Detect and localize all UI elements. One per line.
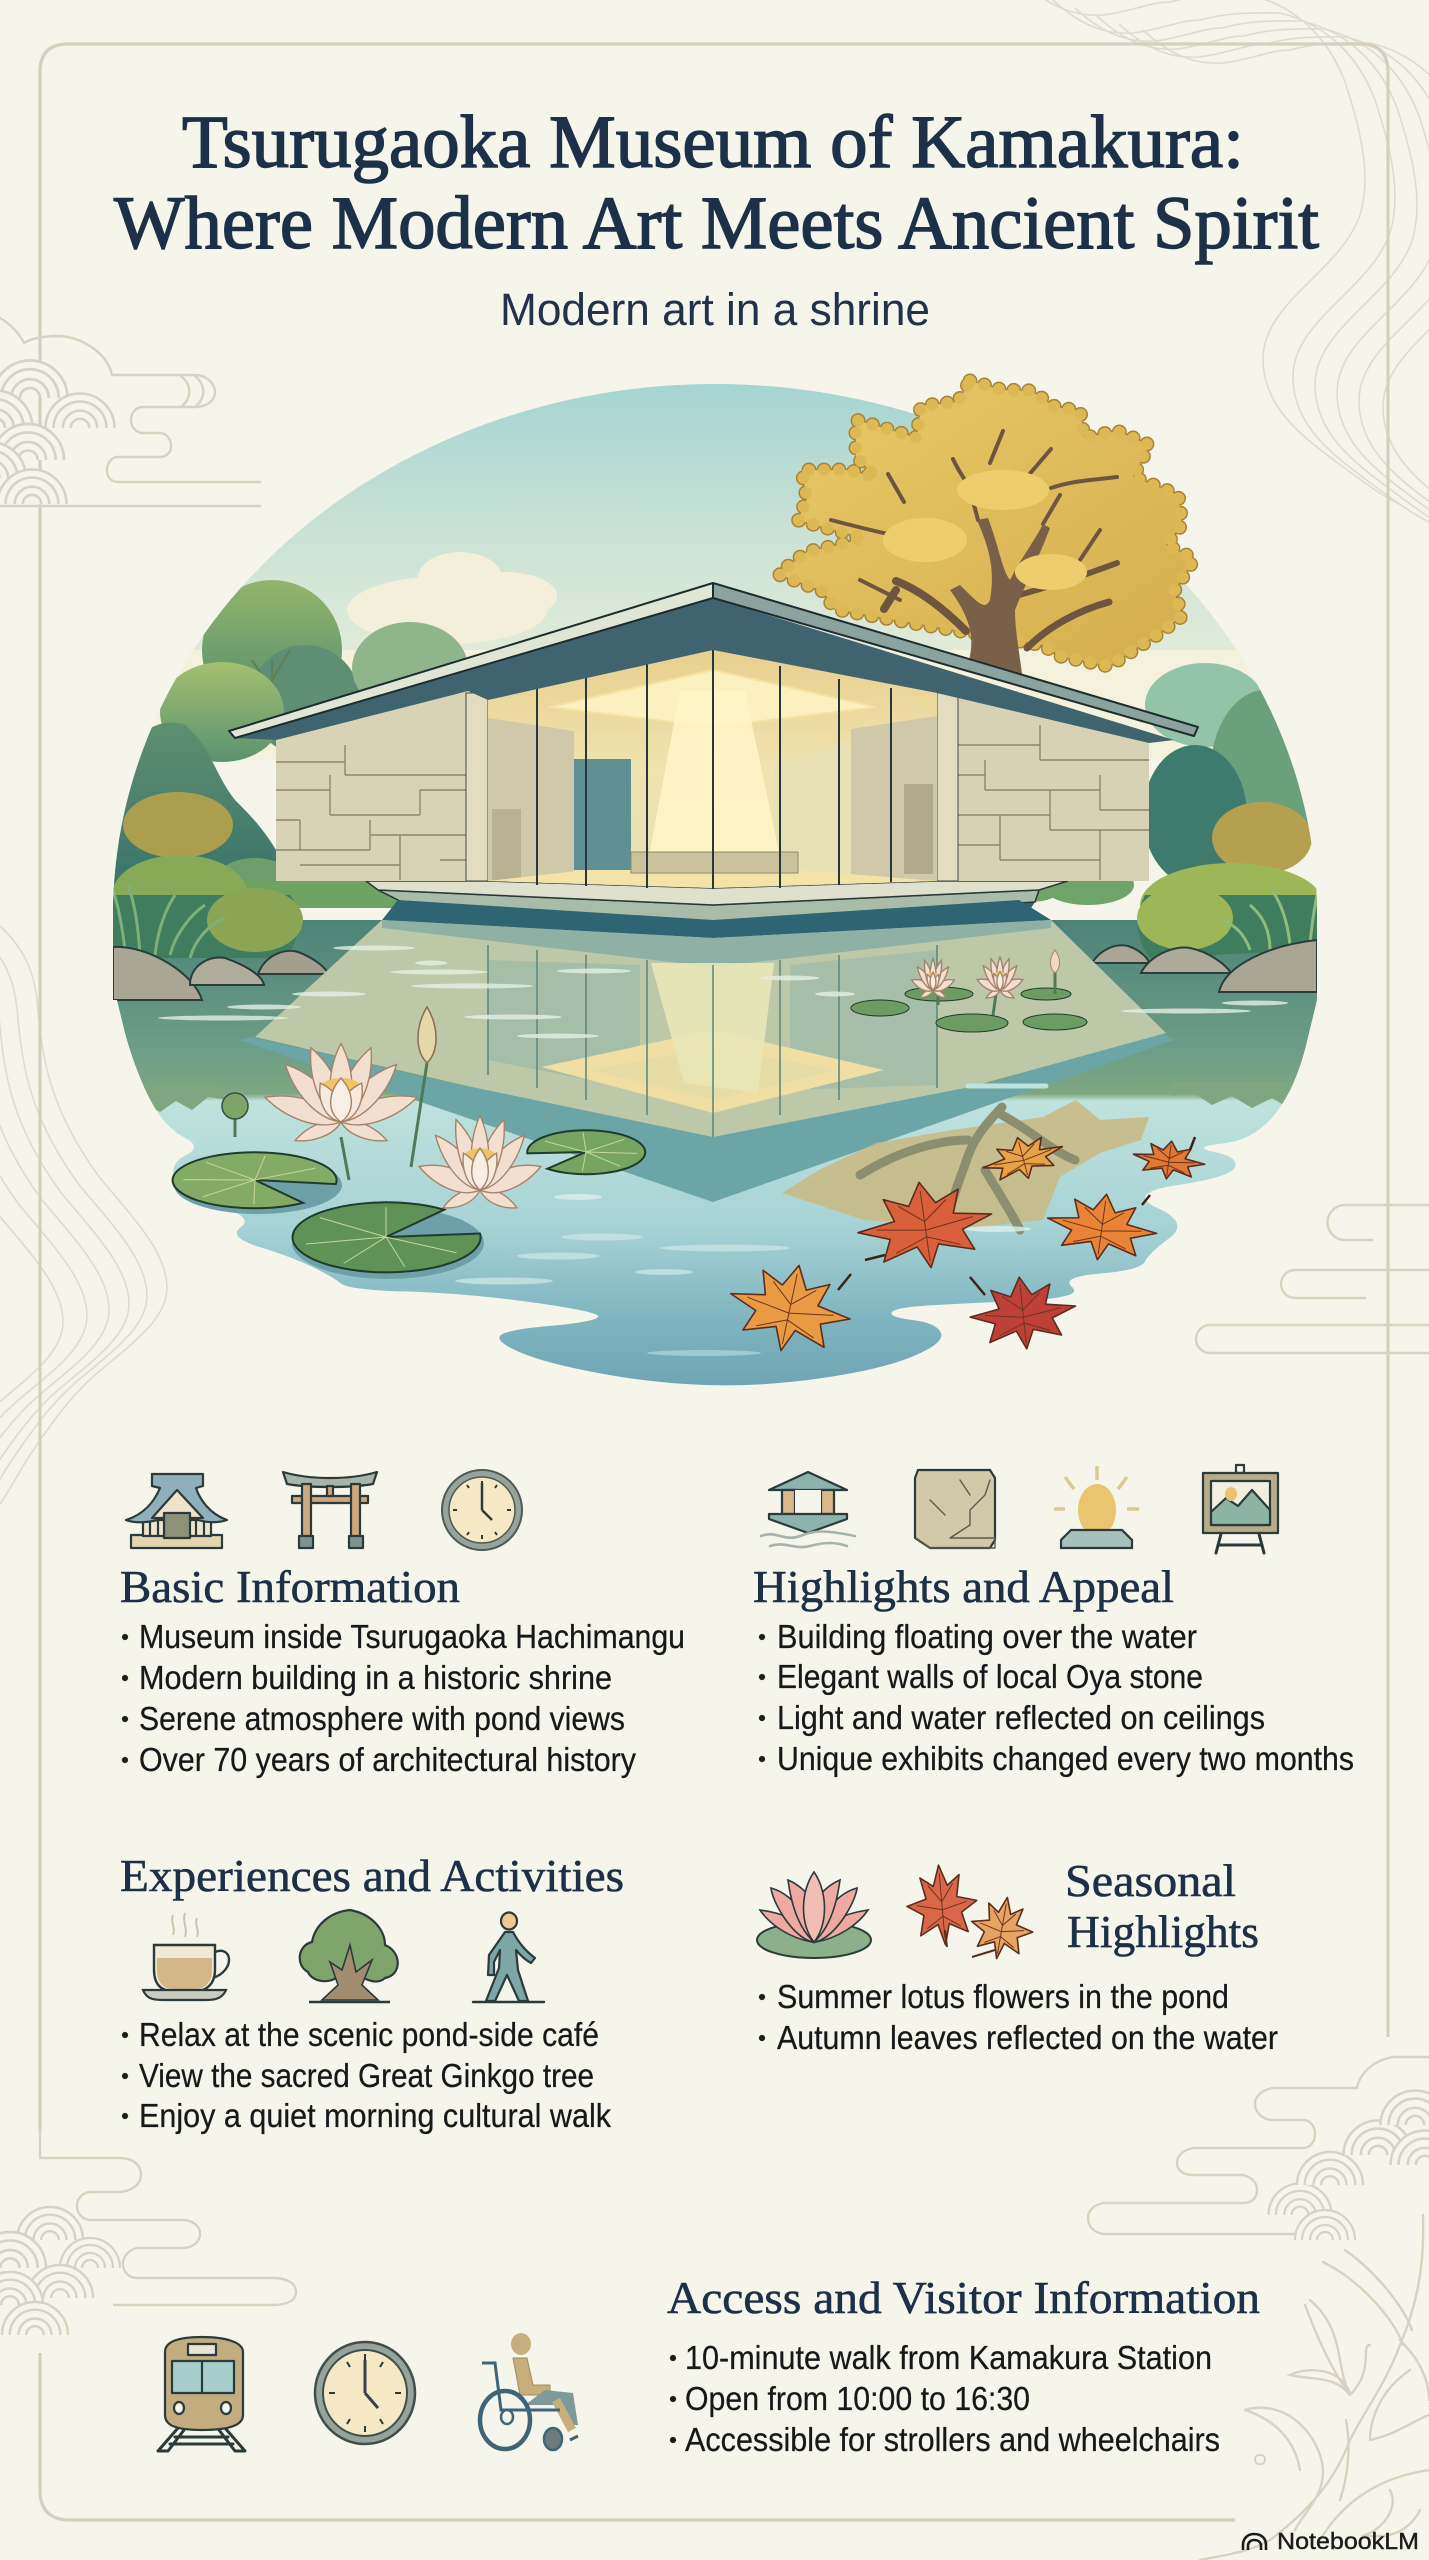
slab side (378, 890, 1039, 922)
decorative cloud: right side (1196, 1205, 1429, 1353)
lotus flowers (222, 950, 1060, 1214)
ginkgo trunk (950, 518, 1050, 674)
icon: torii gate (283, 1472, 377, 1548)
decorative cloud: lower left (0, 2130, 296, 2335)
maple leaves (721, 1127, 1207, 1363)
water highlights (158, 946, 1288, 1356)
roof fascia (235, 598, 1174, 743)
icon: great tree (300, 1910, 398, 2002)
glass interior (488, 650, 937, 888)
waterside greenery right (1137, 886, 1317, 958)
icon: clock (315, 2342, 415, 2444)
icon: lotus on pad (757, 1872, 871, 1958)
heading: Highlights and Appeal: Highlights and Appeal (753, 1561, 1174, 1612)
rocks (113, 940, 1317, 1000)
icon: light over stone (1054, 1466, 1139, 1548)
heading: Access and Visitor Information: Access and Visitor Information (667, 2272, 1260, 2323)
icon: coffee cup (143, 1913, 229, 2000)
bullet list (122, 1618, 685, 1778)
bullet list (759, 1978, 1278, 2056)
panel: Access and Visitor Information (158, 2272, 1260, 2458)
background trees right (1036, 663, 1317, 913)
panel: Highlights and Appeal (753, 1465, 1354, 1777)
icon: stone block (915, 1470, 995, 1548)
lily pads (143, 987, 1087, 1279)
pond water (100, 920, 1330, 1400)
jagged reflection edges (117, 1082, 1300, 1112)
mullions (537, 650, 891, 889)
skylight (549, 670, 876, 727)
cloud (347, 552, 557, 644)
logo icon (1243, 2534, 1266, 2550)
title: Tsurugaoka Museum of Kamakura: (182, 101, 1244, 184)
bullet list: Museum inside Tsurugaoka Hachimangu (139, 1618, 685, 1655)
museum building (229, 583, 1198, 938)
reflected ginkgo (782, 1086, 1149, 1230)
bullet list: Elegant walls of local Oya stone (777, 1658, 1203, 1695)
icon: wheelchair user (480, 2333, 578, 2450)
reflected walls (255, 920, 1166, 1137)
icon: easel with picture (1203, 1465, 1278, 1553)
bullet list (122, 2016, 611, 2134)
icon: shrine (126, 1474, 227, 1548)
ginkgo branches (831, 431, 1117, 648)
roof top strip: left (229, 583, 713, 738)
bench and floor (488, 870, 937, 888)
icon: walking person (473, 1912, 544, 2002)
logo text: NotebookLM (1277, 2528, 1419, 2554)
panel: Experiences and Activities (120, 1850, 624, 2134)
icon: autumn leaves (904, 1862, 1038, 1964)
decorative cloud: upper left (0, 318, 260, 506)
ginkgo tree (778, 381, 1194, 674)
bullet list: Light and water reflected on ceilings (777, 1699, 1265, 1736)
heading: Seasonal Highlights: Seasonal (1065, 1855, 1236, 1906)
bullet list: Open from 10:00 to 16:30 (685, 2380, 1030, 2417)
clipped scene background (100, 380, 1330, 1400)
small green bud (222, 1093, 248, 1119)
reflected ceiling (541, 1030, 884, 1113)
right stone wall (937, 693, 1149, 881)
roof top strip: right (713, 583, 1198, 736)
decorative corner waves: top right (1023, 0, 1429, 552)
ginkgo canopy (778, 381, 1194, 666)
left stone wall (276, 691, 488, 881)
bullet list: Relax at the scenic pond-side café (139, 2016, 599, 2053)
panel: Basic Information (120, 1470, 685, 1778)
reflected slab (382, 900, 1051, 938)
bullet list: View the sacred Great Ginkgo tree (139, 2057, 594, 2094)
bullet list: Over 70 years of architectural history (139, 1741, 636, 1778)
waterside greenery left (113, 885, 303, 958)
heading: Experiences and Activities: Experiences and Activities (120, 1850, 624, 1901)
title: Where Modern Art Meets Ancient Spirit (114, 182, 1319, 265)
sky (194, 384, 1236, 650)
bullet list: Modern building in a historic shrine (139, 1659, 612, 1696)
illustration: museum over the pond (100, 380, 1330, 1400)
heading: Seasonal Highlights (1065, 1855, 1259, 1957)
bullet list (670, 2339, 1220, 2458)
bullet list: Unique exhibits changed every two months (777, 1740, 1354, 1777)
heading: Basic Information: Basic Information (120, 1561, 460, 1612)
icon: clock (442, 1470, 522, 1550)
bullet list: Serene atmosphere with pond views (139, 1700, 625, 1737)
bullet list: Autumn leaves reflected on the water (777, 2019, 1278, 2056)
bullet list: Accessible for strollers and wheelchairs (685, 2421, 1220, 2458)
reflected fascia (239, 1030, 1174, 1202)
bullet list: Enjoy a quiet morning cultural walk (139, 2097, 611, 2134)
title (114, 101, 1319, 265)
icon: train (158, 2337, 245, 2451)
decorative cloud and plant: lower right (1088, 2057, 1429, 2560)
building reflection (239, 900, 1174, 1202)
bullet list: Summer lotus flowers in the pond (777, 1978, 1229, 2015)
ginkgo light clusters (883, 470, 1087, 590)
bullet list: Building floating over the water (777, 1618, 1197, 1655)
subtitle: Modern art in a shrine (500, 284, 930, 335)
bullet list: 10-minute walk from Kamakura Station (685, 2339, 1212, 2376)
slab top (366, 881, 1068, 905)
light beam (647, 691, 782, 866)
slab dark underside (402, 902, 1035, 938)
NotebookLM mark (1243, 2528, 1419, 2554)
cream lower sky (177, 650, 1256, 760)
decorative waves: left side (0, 926, 167, 1538)
icon: floating building (761, 1472, 855, 1547)
lotus bud (418, 1007, 436, 1063)
background trees left (112, 580, 468, 935)
bullet list (759, 1618, 1354, 1777)
heading: Seasonal Highlights: Highlights (1067, 1906, 1259, 1957)
panel: Seasonal Highlights (757, 1855, 1278, 2056)
